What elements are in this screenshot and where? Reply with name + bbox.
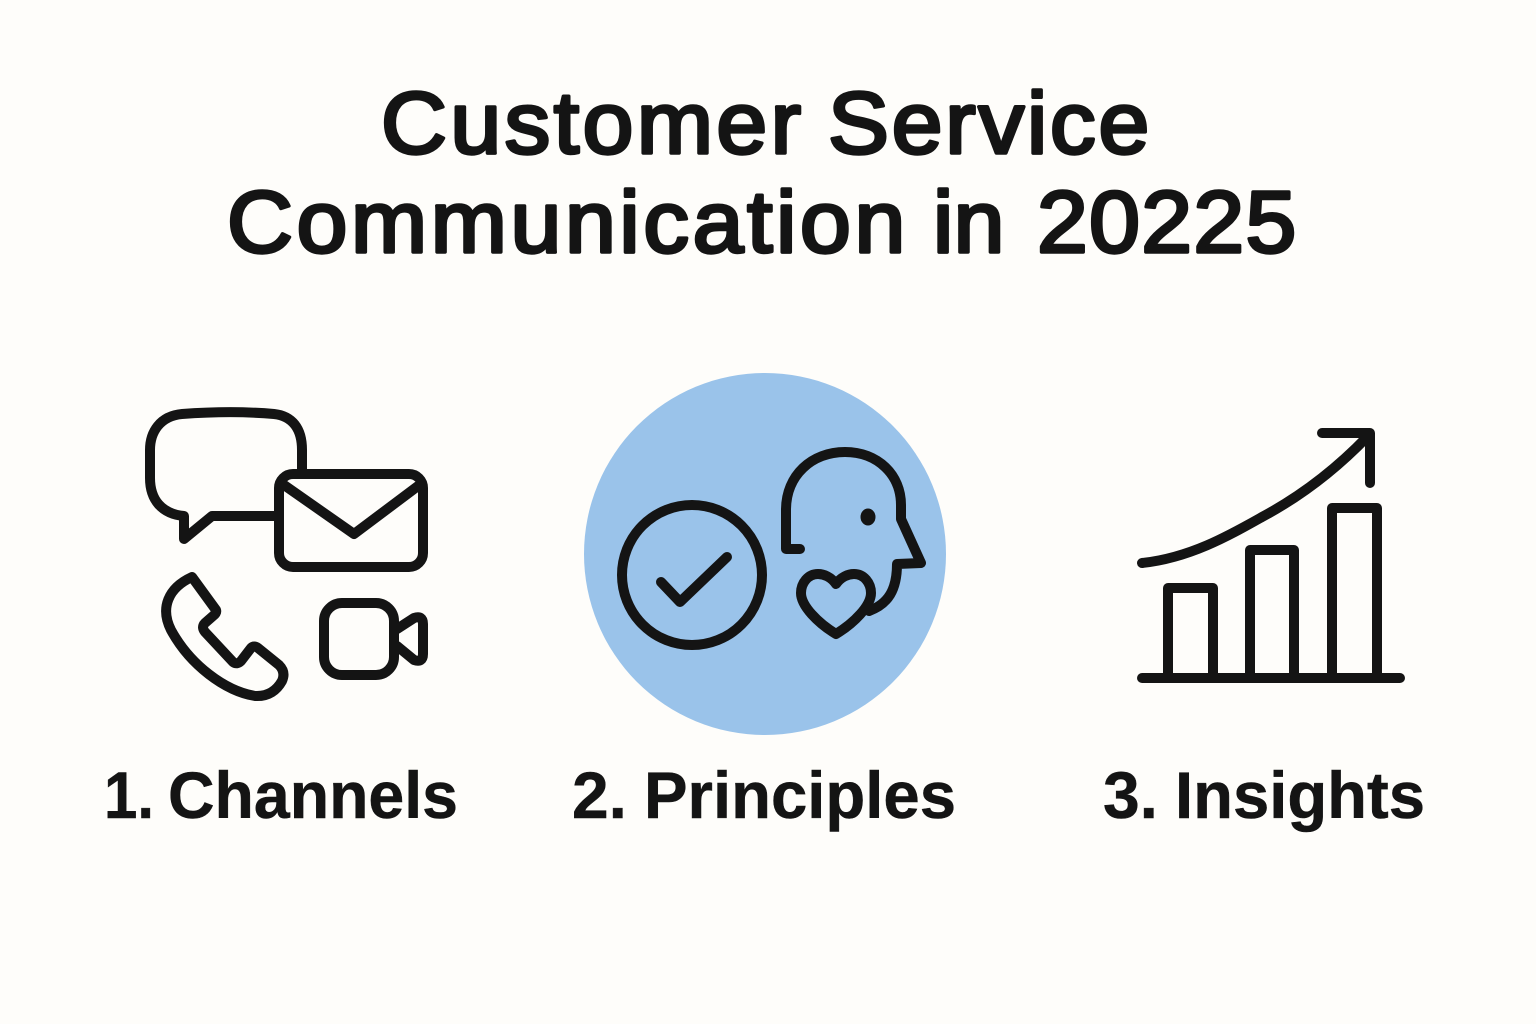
icon: trend arrow	[1142, 433, 1370, 563]
title: 20225	[1037, 173, 1296, 271]
panel: principles icon	[584, 373, 946, 735]
icon: bar chart	[1142, 508, 1400, 678]
label: insights: Insights	[1175, 758, 1425, 832]
label: principles: Principles	[644, 758, 956, 832]
icon: video camera	[324, 603, 423, 675]
label: principles: 2.	[572, 758, 627, 832]
icon: envelope	[279, 474, 423, 567]
icon: speech bubble	[150, 412, 302, 539]
icon: heart	[801, 574, 871, 634]
panel: channels icon	[150, 412, 423, 696]
title: in	[933, 173, 1004, 271]
panel: insights icon	[1142, 433, 1400, 678]
icon: head profile	[786, 452, 921, 611]
icon: phone	[166, 577, 283, 696]
label: insights: 3.	[1103, 758, 1158, 832]
title: Service	[828, 74, 1149, 172]
label: channels: Channels	[168, 758, 458, 832]
title	[227, 74, 1296, 271]
label: channels: 1.	[104, 758, 154, 832]
title: Customer	[381, 74, 801, 172]
blue circle	[584, 373, 946, 735]
icon: check circle	[622, 505, 762, 645]
title: Communication	[227, 173, 905, 271]
